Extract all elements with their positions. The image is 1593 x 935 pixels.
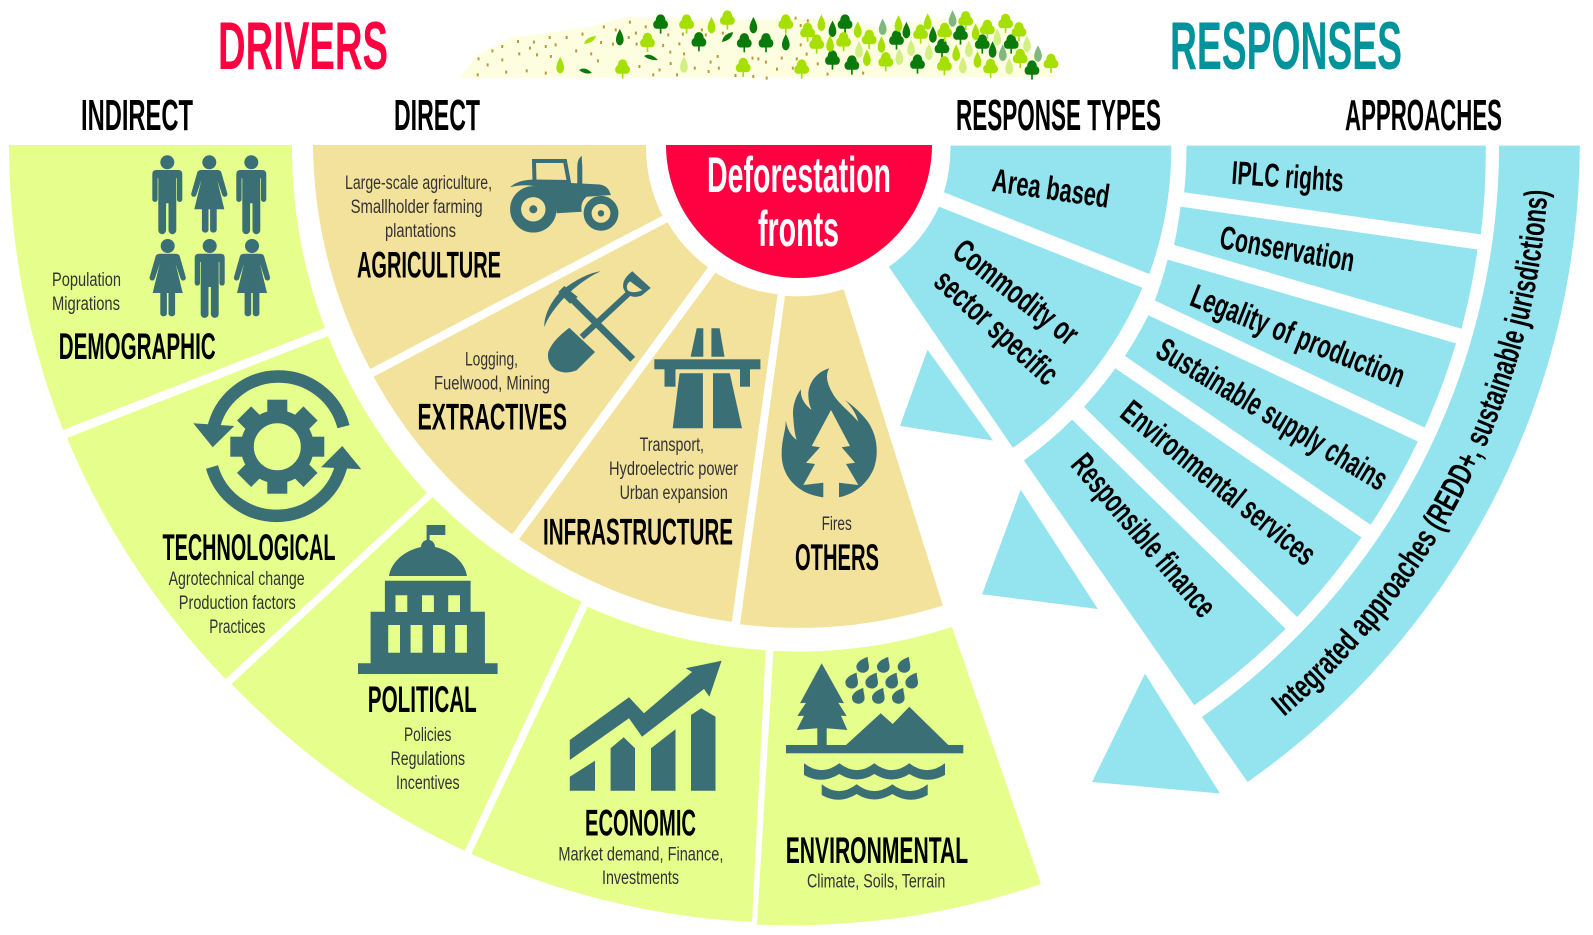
label: extractives: EXTRACTIVES <box>418 396 567 437</box>
label: infrastructure: INFRASTRUCTURE <box>543 511 733 552</box>
label: environmental services: Environmental services <box>1114 393 1324 572</box>
triangle: large <box>1092 674 1220 794</box>
icon: burning tree <box>782 368 877 499</box>
text: infrastructure types <box>609 435 739 504</box>
panel: area based <box>944 146 1171 274</box>
text: agriculture types: plantations <box>385 221 456 242</box>
icon: highway overpass <box>654 328 760 428</box>
text: infrastructure types: Hydroelectric power <box>609 459 739 480</box>
triangle: medium <box>982 490 1098 609</box>
label: agriculture: AGRICULTURE <box>357 245 501 286</box>
panel: others <box>740 289 943 628</box>
icon: tractor <box>510 156 614 227</box>
text: extractive types: Logging, <box>465 350 518 371</box>
label: political: POLITICAL <box>368 679 477 720</box>
label: deforestation fronts: fronts <box>758 201 839 257</box>
label: sustainable supply chains: Sustainable supply chains <box>1150 330 1395 497</box>
text: political factors: Regulations <box>391 749 465 770</box>
panel: IPLC rights <box>1184 146 1486 234</box>
text: infrastructure types: Transport, <box>640 435 704 456</box>
panel: demographic <box>9 145 325 430</box>
label: commodity or sector specific <box>927 231 1086 392</box>
text: environmental factors: Climate, Soils, Terrain <box>807 872 945 893</box>
text: infrastructure types: Urban expansion <box>620 483 728 504</box>
label: deforestation fronts <box>707 147 891 257</box>
icon: rising chart <box>570 661 722 791</box>
icon: people <box>150 155 270 318</box>
label: commodity or sector specific: sector specific <box>927 262 1067 392</box>
panel: technological <box>67 336 427 679</box>
text: economic factors <box>558 845 723 889</box>
heading: direct: DIRECT <box>394 91 480 140</box>
title: drivers: DRIVERS <box>218 8 388 84</box>
panel: infrastructure <box>519 273 778 622</box>
panel: commodity or sector specific <box>889 207 1142 448</box>
panel: environmental services <box>1084 368 1361 617</box>
text: technological factors: Practices <box>209 617 265 638</box>
text: extractive types: Fuelwood, Mining <box>434 374 550 395</box>
triangle: small <box>900 350 993 441</box>
text: political factors: Policies <box>404 725 451 746</box>
text: economic factors: Investments <box>602 868 679 889</box>
text: agriculture types <box>345 173 492 242</box>
label: technological: TECHNOLOGICAL <box>162 527 336 568</box>
text: technological factors <box>169 569 305 638</box>
label: demographic: DEMOGRAPHIC <box>59 326 216 367</box>
label: area based: Area based <box>990 161 1112 215</box>
label: conservation: Conservation <box>1217 218 1358 279</box>
label: deforestation fronts: Deforestation <box>707 147 891 203</box>
panel: sustainable supply chains <box>1125 315 1418 525</box>
panel: deforestation fronts <box>666 145 932 278</box>
panel: responsible finance <box>1024 420 1286 705</box>
panel: agriculture <box>313 145 662 369</box>
label: integrated approaches: Integrated approaches (REDD+, sustainable jurisdictions) <box>1270 190 1554 716</box>
forest illustration <box>460 10 1058 80</box>
panel: extractives <box>374 222 708 534</box>
label: others: OTHERS <box>795 537 879 578</box>
text: technological factors: Agrotechnical change <box>169 569 305 590</box>
text: fires: Fires <box>822 514 852 535</box>
panel: conservation <box>1174 207 1478 329</box>
panel: legality of production <box>1155 260 1456 428</box>
text: population migrations <box>52 270 121 315</box>
heading: response types: RESPONSE TYPES <box>956 91 1161 140</box>
text: extractive types <box>434 350 550 395</box>
text: population migrations: Population <box>52 270 121 291</box>
label: responsible finance: Responsible finance <box>1064 446 1224 624</box>
text: technological factors: Production factors <box>179 593 296 614</box>
text: political factors <box>391 725 465 794</box>
title: responses: RESPONSES <box>1170 8 1402 84</box>
text: agriculture types: Large-scale agriculture, <box>345 173 492 194</box>
panel: economic <box>471 607 766 922</box>
icon: pickaxe and shovel <box>544 271 651 372</box>
icon: capitol building <box>358 525 498 674</box>
text: political factors: Incentives <box>396 773 460 794</box>
heading: indirect: INDIRECT <box>81 91 193 140</box>
panel: integrated approaches <box>1202 146 1580 782</box>
text: economic factors: Market demand, Finance, <box>558 845 723 866</box>
label: economic: ECONOMIC <box>585 803 696 844</box>
text: population migrations: Migrations <box>52 294 120 315</box>
panel: political <box>232 497 582 851</box>
icon: tree, rain, mountains, water <box>786 657 963 800</box>
label: environmental: ENVIRONMENTAL <box>786 830 968 871</box>
label: commodity or sector specific: Commodity or <box>946 231 1086 352</box>
icon: gear with cycle arrows <box>193 376 361 516</box>
text: agriculture types: Smallholder farming <box>351 197 483 218</box>
label: legality of production: Legality of production <box>1186 277 1410 394</box>
panel: environmental <box>757 627 1041 925</box>
label: IPLC rights: IPLC rights <box>1231 154 1345 198</box>
